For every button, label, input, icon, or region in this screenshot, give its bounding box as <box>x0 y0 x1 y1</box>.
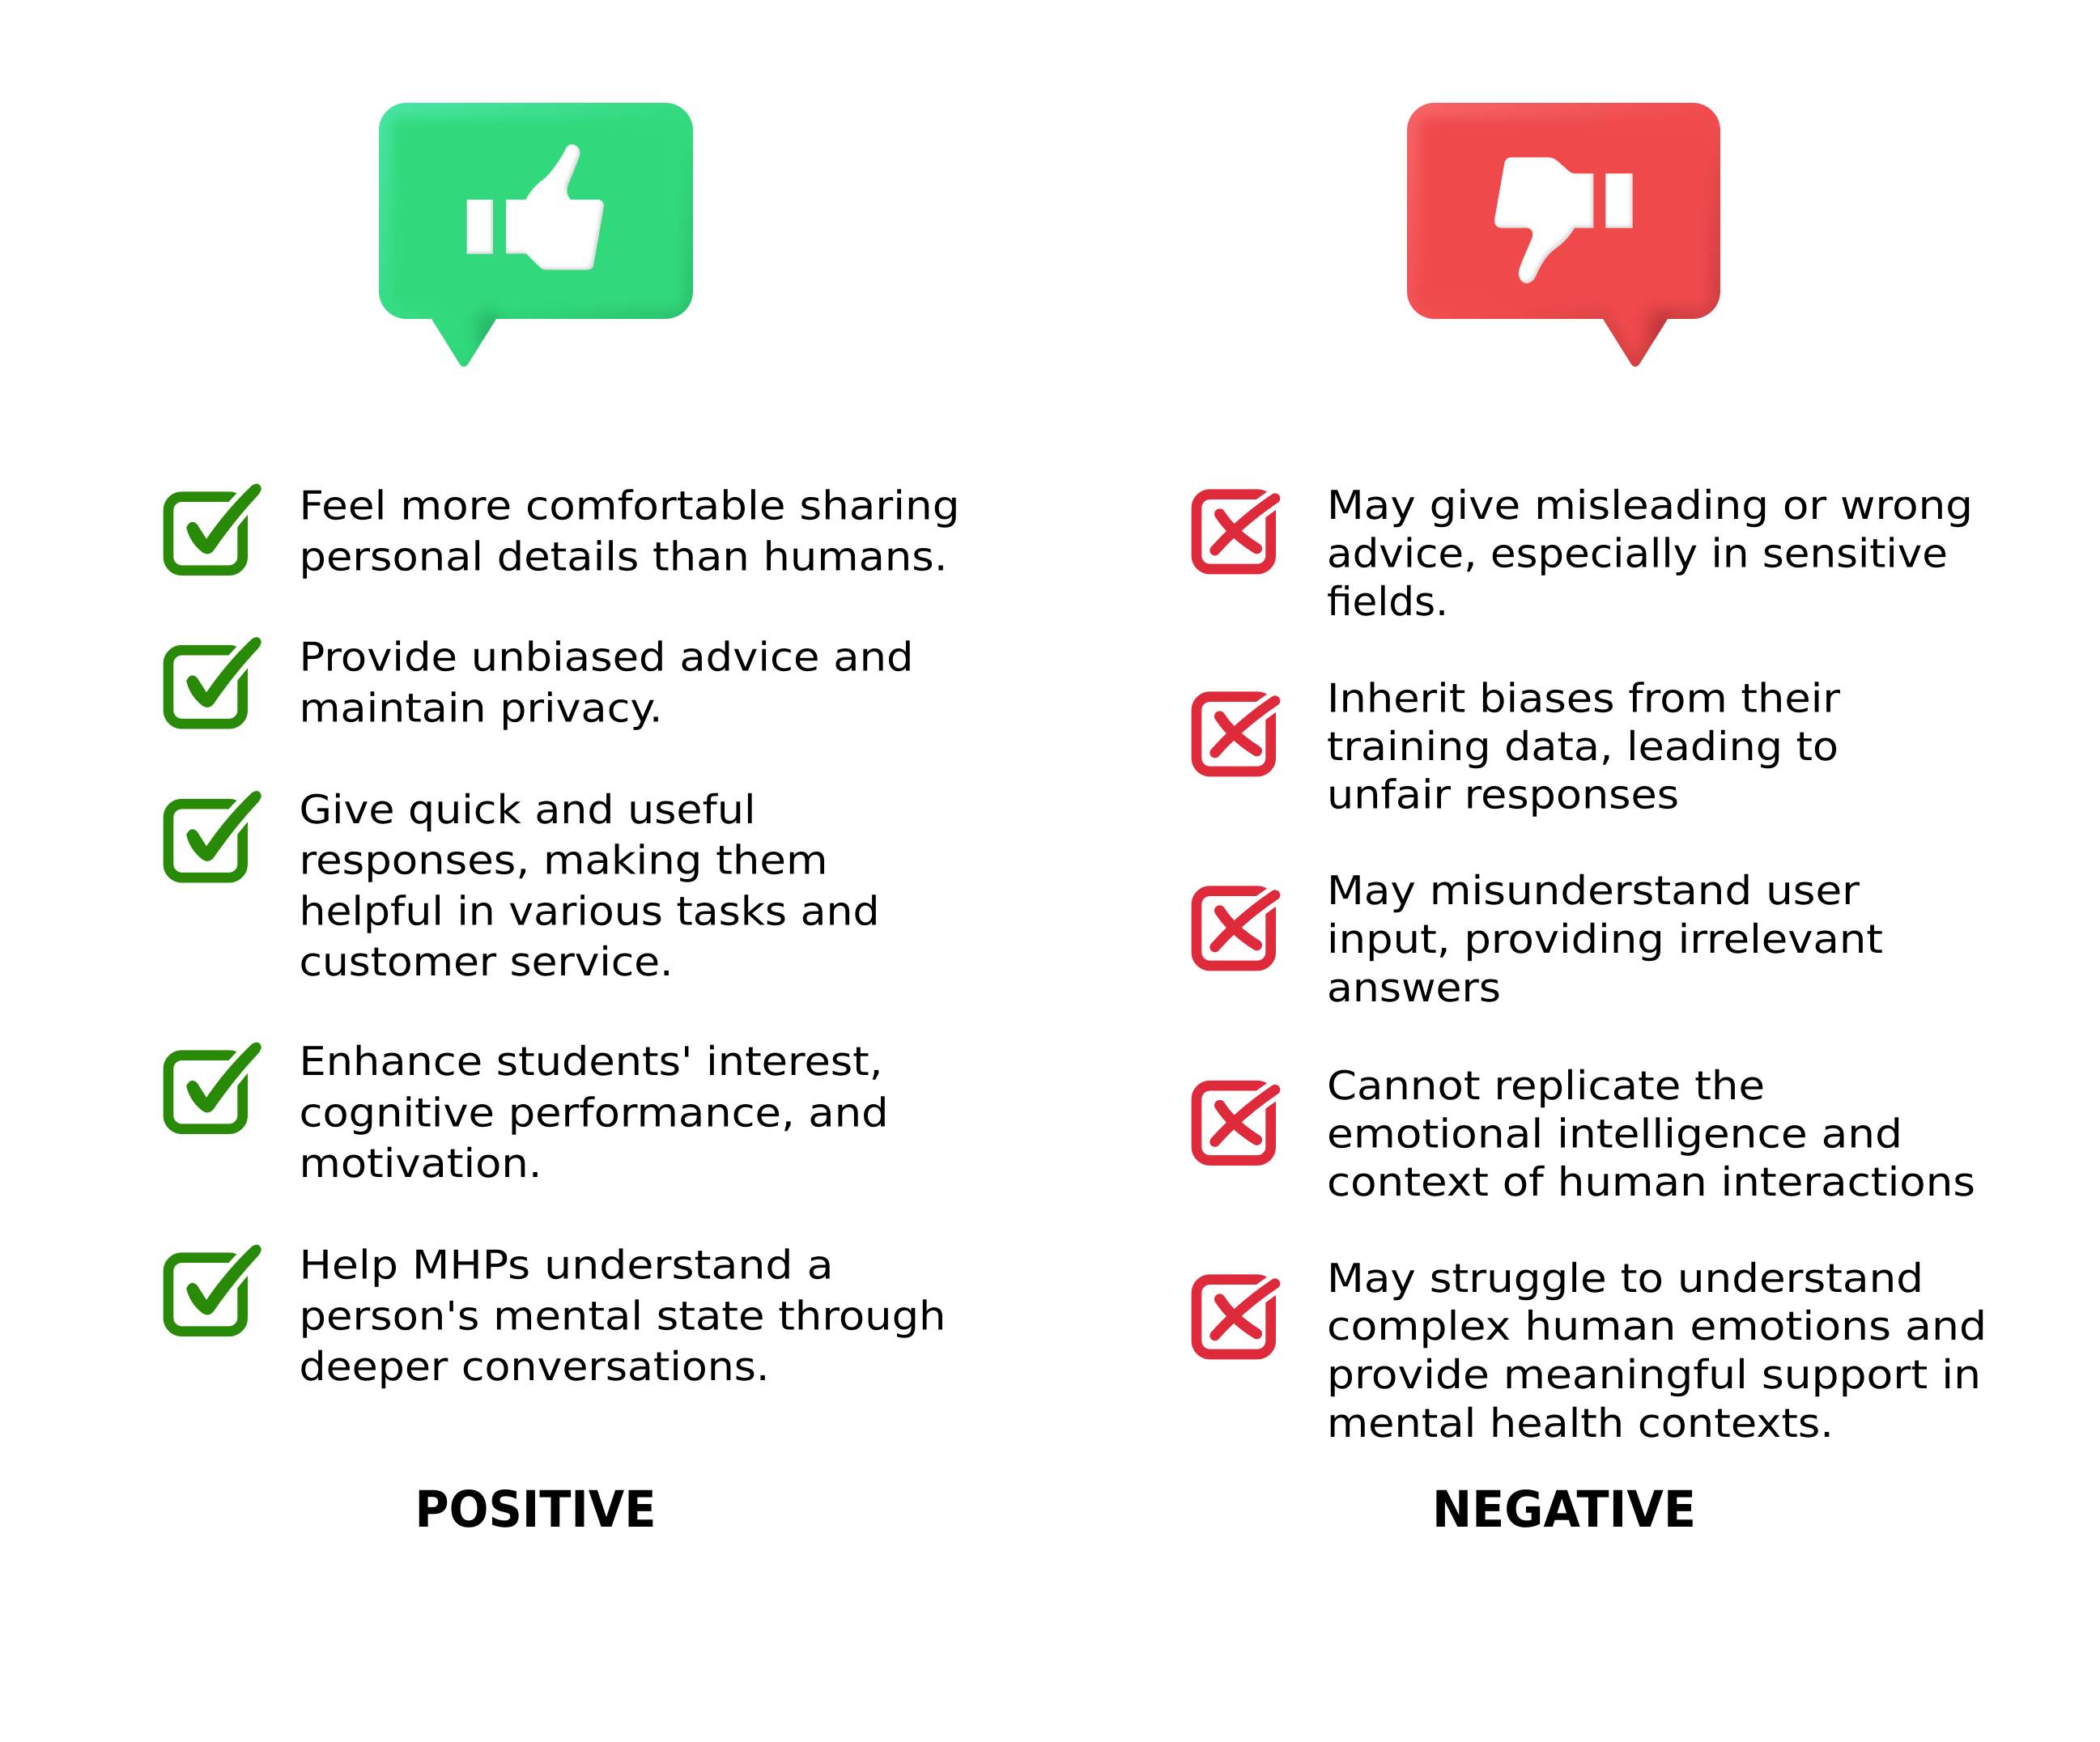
icon: red cross box <box>1197 697 1275 771</box>
text: misunderstood input: answers <box>1327 965 1501 1011</box>
text: misunderstood input <box>1327 868 1883 1011</box>
text: student interest: cognitive performance, and <box>300 1090 889 1137</box>
icon: green check box <box>168 638 261 724</box>
text: inherited biases: Inherit biases from their <box>1327 675 1841 722</box>
icon: red cross box <box>1197 1280 1275 1354</box>
text: complex emotions: provide meaningful support in <box>1327 1352 1981 1398</box>
text: student interest: motivation. <box>300 1141 542 1187</box>
text: comfortable sharing: personal details than humans. <box>300 534 947 580</box>
item: misunderstood input <box>1197 868 1883 1011</box>
list: negative points <box>1197 482 1987 1447</box>
text: emotional intelligence <box>1327 1063 1975 1205</box>
text: complex emotions: complex human emotions and <box>1327 1303 1987 1349</box>
item: emotional intelligence <box>1197 1063 1975 1205</box>
text: misunderstood input: May misunderstand user <box>1327 868 1860 914</box>
text: complex emotions: May struggle to understand <box>1327 1256 1924 1302</box>
text: emotional intelligence: emotional intelligence and <box>1327 1111 1902 1158</box>
icon: red cross box <box>1197 891 1275 966</box>
text: mental state: person's mental state through <box>300 1294 946 1339</box>
icon: red speech bubble with thumbs down <box>1407 103 1720 367</box>
text: inherited biases: training data, leading to <box>1327 724 1839 770</box>
text: inherited biases <box>1327 675 1841 818</box>
text: quick responses: responses, making them <box>300 838 828 884</box>
heading: negative: NEGATIVE <box>1432 1480 1696 1539</box>
text: mental state <box>300 1242 946 1390</box>
item: student interest <box>168 1039 888 1187</box>
item: quick responses <box>168 787 879 985</box>
icon: green speech bubble with thumbs up <box>379 103 693 367</box>
icon: green check box <box>168 1245 261 1332</box>
text: comfortable sharing: Feel more comfortable sharing <box>300 482 960 529</box>
text: mental state: deeper conversations. <box>300 1344 769 1390</box>
text: comfortable sharing <box>300 482 960 580</box>
text: unbiased advice <box>300 635 913 732</box>
text: quick responses <box>300 787 879 985</box>
item: comfortable sharing <box>168 482 959 580</box>
item: unbiased advice <box>168 635 913 732</box>
heading: positive: POSITIVE <box>414 1480 656 1539</box>
panel: positive <box>168 103 959 1539</box>
text: emotional intelligence: context of human interactions <box>1327 1159 1975 1205</box>
text: complex emotions: mental health contexts. <box>1327 1400 1834 1447</box>
text: unbiased advice: Provide unbiased advice and <box>300 635 913 680</box>
item: inherited biases <box>1197 675 1841 818</box>
list: positive points <box>168 482 959 1390</box>
icon: red cross box <box>1197 1086 1275 1160</box>
text: misleading advice: fields. <box>1327 579 1448 625</box>
item: complex emotions <box>1197 1256 1987 1447</box>
text: mental state: Help MHPs understand a <box>300 1242 834 1289</box>
item: mental state <box>168 1242 946 1390</box>
icon: red cross box <box>1197 495 1275 569</box>
text: misleading advice: advice, especially in sensitive <box>1327 531 1948 576</box>
text: student interest <box>300 1039 889 1187</box>
panel: negative <box>1197 103 1987 1539</box>
text: student interest: Enhance students' interest, <box>300 1039 882 1085</box>
text: quick responses: Give quick and useful <box>300 787 756 833</box>
text: misunderstood input: input, providing irrelevant <box>1327 916 1883 962</box>
text: misleading advice: May give misleading or wrong <box>1327 482 1973 529</box>
text: complex emotions <box>1327 1256 1987 1447</box>
icon: green check box <box>168 484 261 571</box>
item: misleading advice <box>1197 482 1973 625</box>
text: emotional intelligence: Cannot replicate the <box>1327 1063 1765 1109</box>
text: unbiased advice: maintain privacy. <box>300 685 662 732</box>
text: inherited biases: unfair responses <box>1327 772 1679 818</box>
text: misleading advice <box>1327 482 1973 625</box>
text: quick responses: helpful in various tasks and <box>300 888 879 934</box>
icon: green check box <box>168 792 261 877</box>
text: quick responses: customer service. <box>300 939 674 985</box>
infographic: positive and negative comparison <box>164 103 1983 1527</box>
icon: green check box <box>168 1043 261 1129</box>
